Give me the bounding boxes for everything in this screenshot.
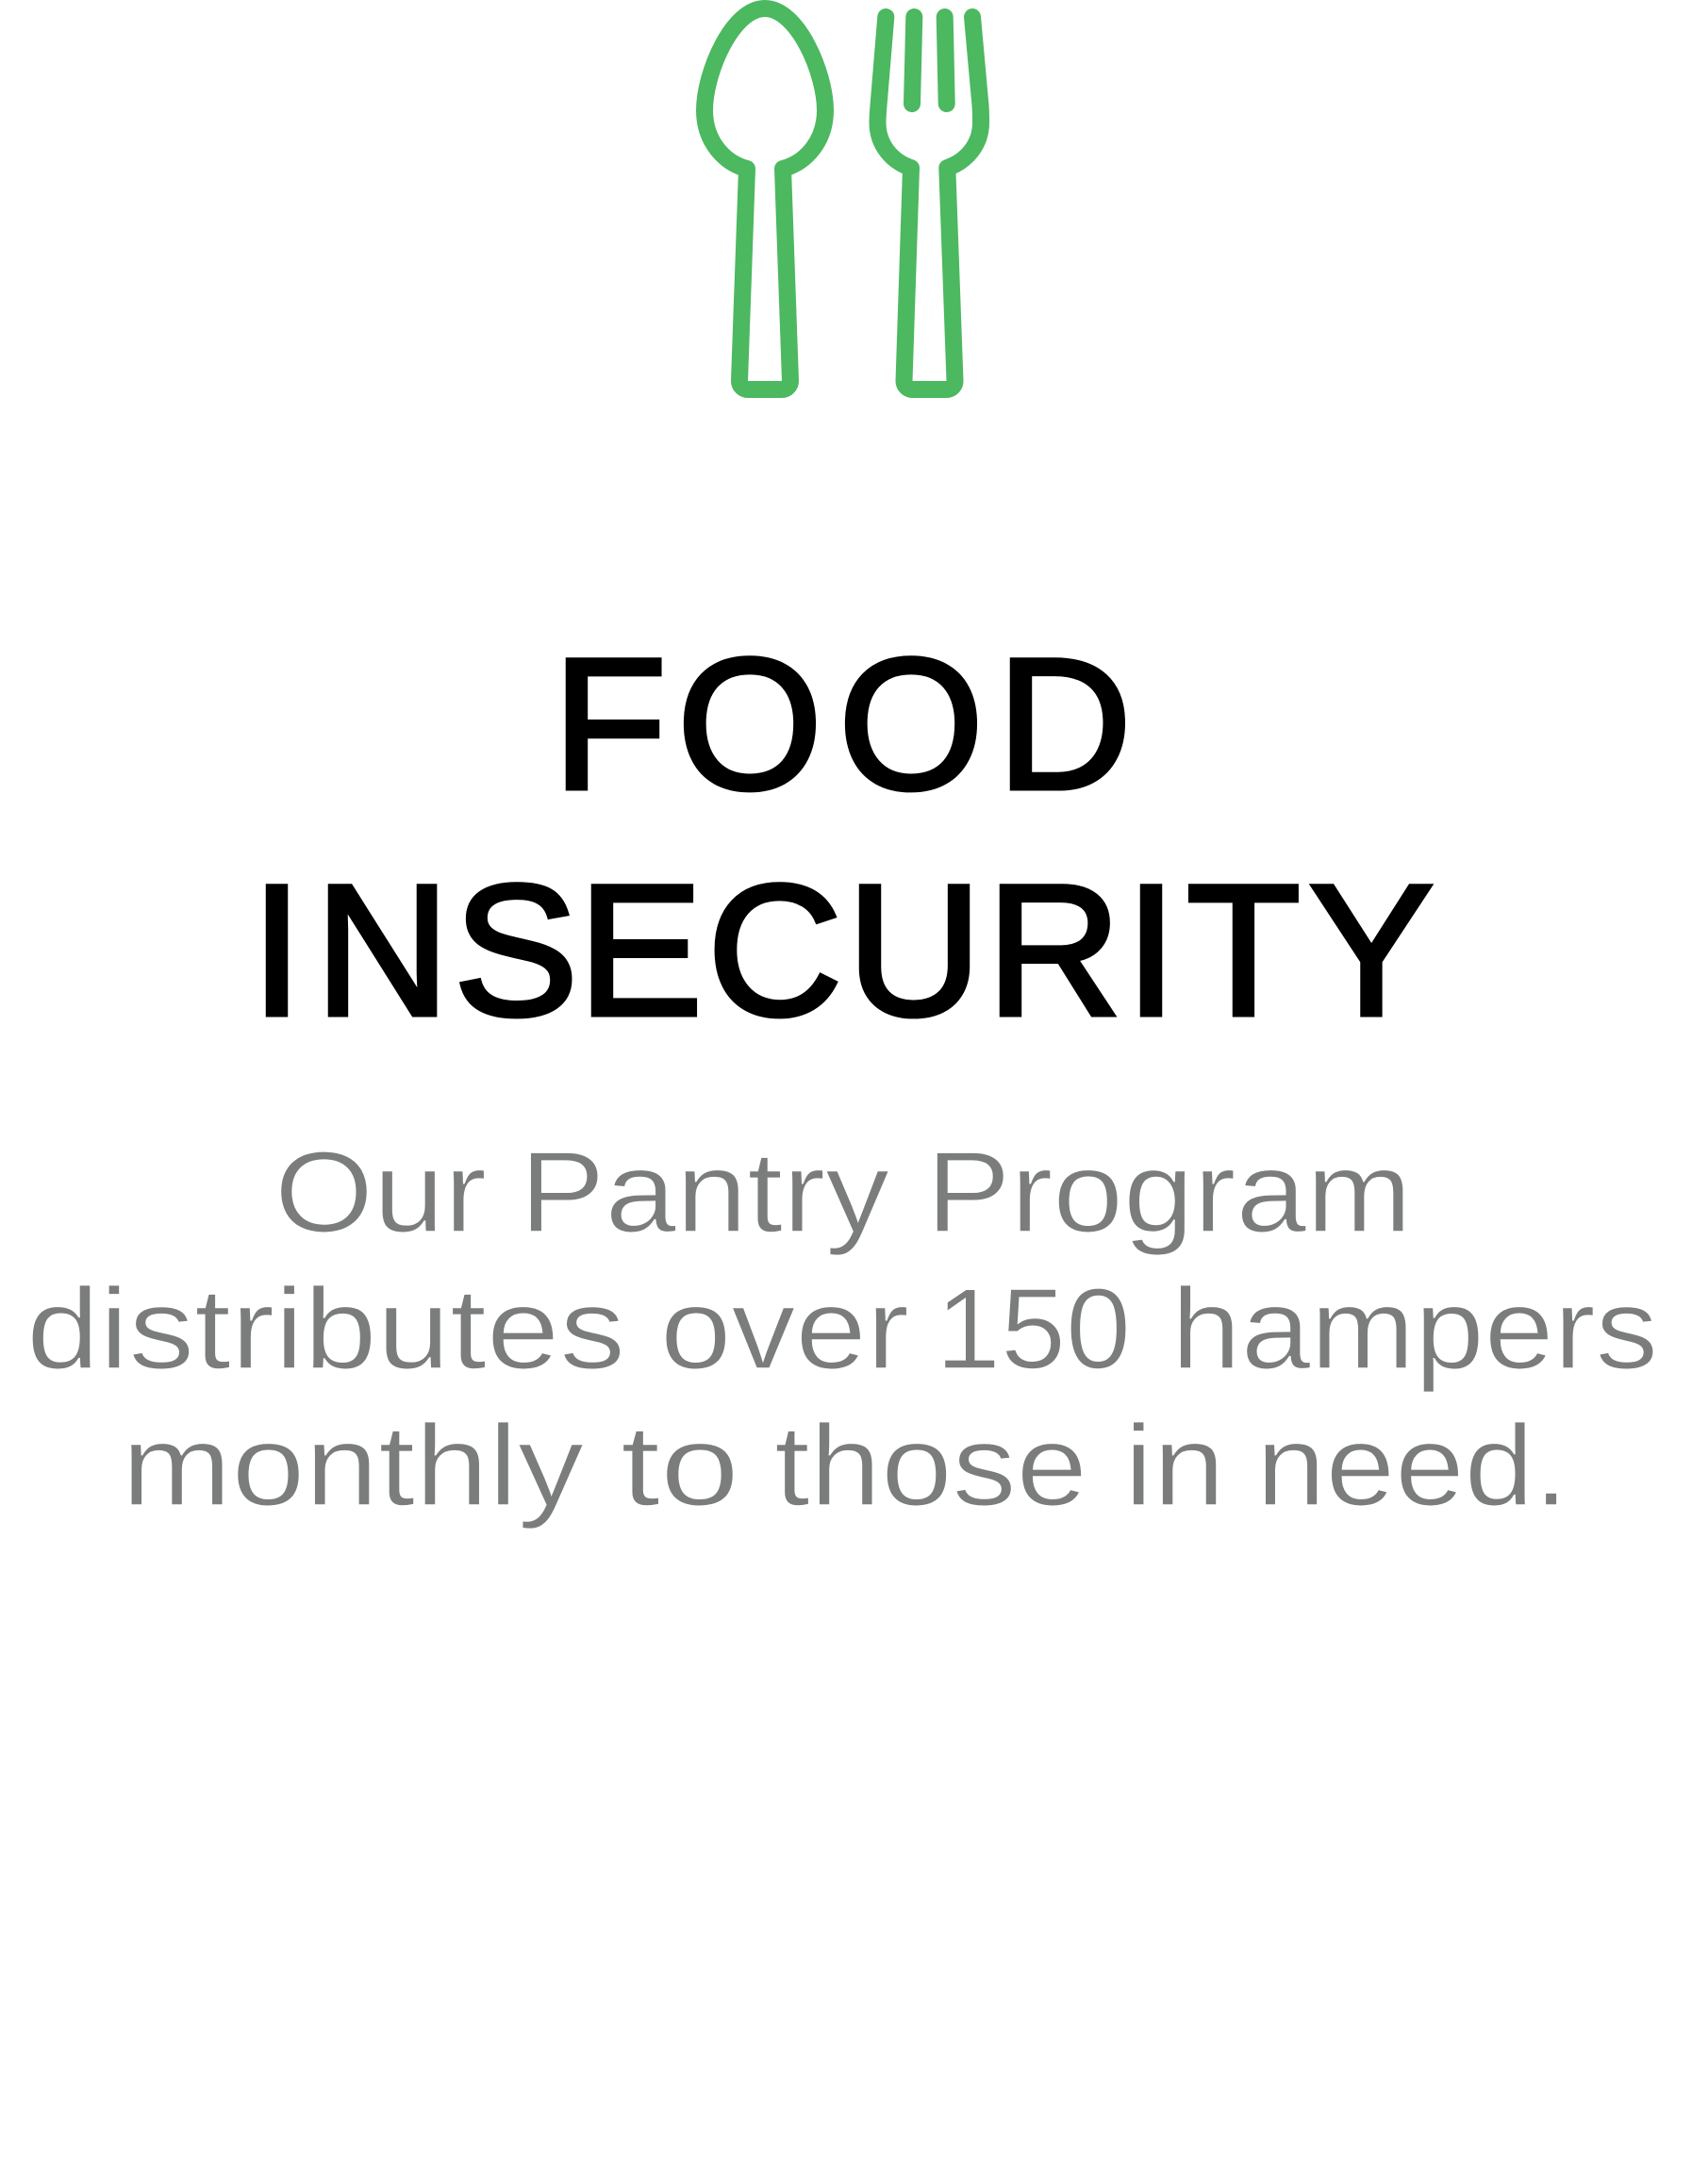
icon: spoon [705,8,825,389]
body line 3: in [1124,1401,1225,1530]
body line 3: need. [1256,1401,1568,1530]
heading [251,620,1434,1054]
icon: spoon and fork [705,8,981,389]
body line 2: distributes [26,1265,625,1393]
body line 3: those [774,1401,1087,1530]
body line 2: hampers [1171,1265,1658,1393]
heading line 2: INSECURITY [251,846,1434,1054]
body line 1: Our [274,1128,487,1256]
body text [26,1128,1658,1530]
body line 3: monthly [122,1401,584,1530]
body line 2: over [660,1265,909,1393]
body line 1: Pantry [520,1128,889,1256]
icon: fork [877,17,981,389]
body line 2: 150 [936,1265,1131,1393]
body line 3: to [621,1401,739,1530]
heading line 1: FOOD [553,620,1132,828]
body line 1: Program [926,1128,1412,1256]
